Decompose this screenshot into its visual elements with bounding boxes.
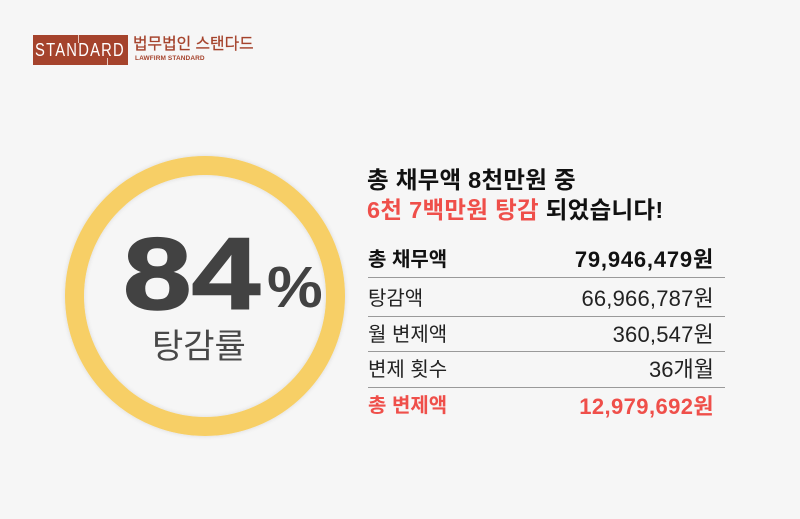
percent sign: %: [267, 255, 323, 320]
headline line 2: 6천 7백만원 탕감 되었습니다!: [367, 197, 663, 223]
table: 총 채무액: [368, 249, 447, 271]
row: total debt: [368, 247, 714, 272]
table: [368, 247, 725, 419]
ring gauge: [64, 154, 346, 438]
logo: [33, 35, 254, 65]
table: 79,946,479원: [575, 247, 714, 272]
row: repayment count: [368, 357, 714, 382]
table: 변제 횟수: [368, 359, 447, 381]
row: monthly repayment: [368, 322, 714, 347]
table: 66,966,787원: [581, 286, 714, 311]
percent value: 84: [123, 217, 260, 331]
row: total repayment: [368, 394, 714, 419]
headline line 1: 총 채무액 8천만원 중: [367, 167, 576, 193]
table: 36개월: [649, 357, 714, 382]
table: 12,979,692원: [579, 394, 714, 419]
logo english name: LAWFIRM STANDARD: [135, 55, 205, 62]
table: 탕감액: [368, 288, 423, 310]
row: reduced amount: [368, 286, 714, 311]
table: 월 변제액: [368, 324, 447, 346]
table: 총 변제액: [368, 395, 447, 417]
logo firm name: 법무법인 스탠다드: [133, 36, 254, 53]
reduction rate label: 탕감률: [152, 328, 246, 366]
logo mark: STANDARD: [33, 35, 128, 65]
logo mark: STANDARD: STANDARD: [35, 40, 125, 60]
headline: [367, 167, 663, 223]
table: 360,547원: [613, 322, 714, 347]
